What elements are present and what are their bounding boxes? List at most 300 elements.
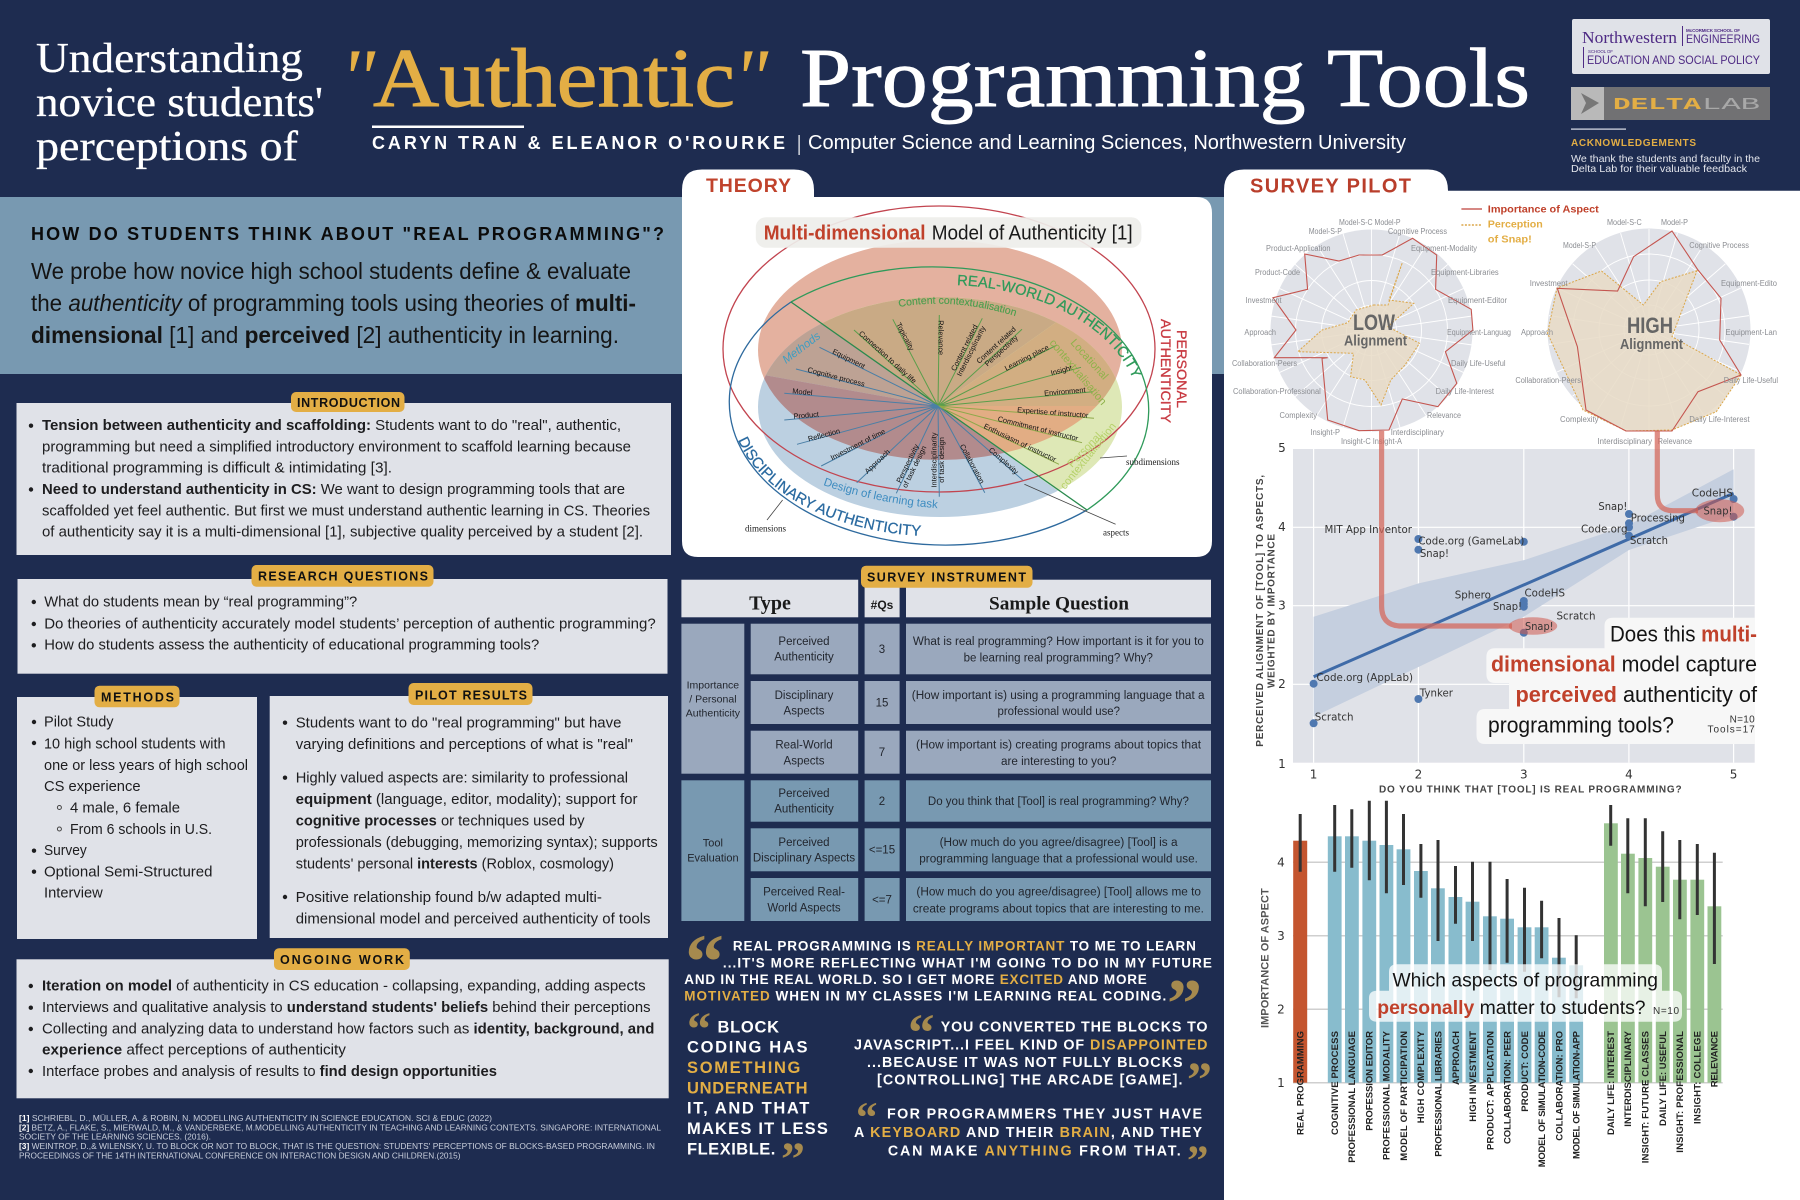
panel: methods: [17, 686, 257, 939]
radar chart: low alignment: Equipment-Libraries: [1431, 268, 1499, 277]
table group: importance / personal authenticity: Importance: [687, 679, 739, 691]
quote: keyboard and their brain: FOR PROGRAMMERS THEY JUST HAVE: [887, 1107, 1202, 1123]
aspect labels: Investment of time: [829, 427, 887, 462]
dimension labels: REAL-WORLD AUTHENTICITY: [958, 274, 1142, 376]
axis ticks: 1: [1310, 767, 1317, 781]
table group: importance / personal authenticity: [681, 624, 1211, 774]
table group: tool evaluation: [681, 780, 1211, 921]
bars: real-world aspects: [1604, 823, 1721, 1083]
text block: band summary: the authenticity of programming tools using theories of multi-: [31, 290, 636, 316]
regression line: [1314, 493, 1734, 677]
radar chart: low alignment: [1232, 218, 1511, 446]
text block: pilot results list: professionals (debugging, memorizing syntax); supports: [296, 834, 658, 851]
callout: does this model capture perceived authenticity: programming tools?: [1488, 713, 1674, 738]
logo: delta lab: [1571, 87, 1770, 120]
aspect labels: Collaboration: [958, 443, 987, 485]
tag: methods: [94, 686, 180, 707]
quote: real programming is really important: [684, 918, 1212, 1043]
text block: introduction bullets: of authenticity say it is a multi-dimensional [1], subjective quality perceived by a student [2].: [42, 524, 643, 541]
radar chart: low alignment: Model-S-P: [1309, 227, 1342, 236]
tool labels: Sphero: [1455, 588, 1491, 601]
diagram legend: subdimensions, dimensions, aspects: dimensions: [745, 524, 786, 534]
radar chart: low alignment: Complexity: [1280, 411, 1317, 420]
heading: how do students think: HOW DO STUDENTS THINK ABOUT "REAL PROGRAMMING"?: [31, 224, 664, 244]
quote: converted the blocks to javascript: [854, 1004, 1212, 1107]
table header: [681, 580, 1211, 617]
text block: introduction bullets: traditional programming is difficult & intimidating [3].: [42, 460, 392, 477]
table group: tool evaluation: 2: [879, 796, 885, 808]
text block: band summary: [31, 258, 636, 348]
callout: does this model capture perceived authenticity: Does this multi-: [1610, 622, 1757, 647]
diagram title pill: Multi-dimensional: [764, 222, 926, 244]
table group: tool evaluation: Perceived Real-: [763, 887, 845, 899]
title: authentic programming tools: Authentic: [373, 32, 735, 125]
aspect labels: Perspectivity: [894, 442, 921, 484]
dimension labels: Personal: [1066, 431, 1104, 470]
connector: low alignment radar to snap point: Snap!: [1525, 620, 1554, 633]
y axis ticks and title: 4: [1277, 856, 1285, 870]
quote: real programming is really important: “: [685, 918, 724, 1005]
diagram title pill: Model of Authenticity [1]: [932, 222, 1133, 244]
text block: methods list: Interview: [44, 885, 103, 902]
bar labels: DAILY LIFE: USEFUL: [1658, 1031, 1669, 1126]
text block: methods list: 10 high school students with: [44, 735, 226, 752]
diagram legend: subdimensions, dimensions, aspects: aspects: [1103, 528, 1129, 538]
acknowledgements: ACKNOWLEDGEMENTS: [1571, 138, 1696, 149]
title: authentic programming tools: Programming Tools: [800, 32, 1530, 125]
error bars: [1300, 801, 1714, 998]
diagram legend: subdimensions, dimensions, aspects: [745, 456, 1180, 538]
text block: band summary: dimensional [1] and perceived [2] authenticity in learning.: [31, 322, 619, 348]
callout: does this model capture perceived authenticity: Tools=17: [1708, 725, 1755, 736]
dimension labels: PERSONAL: [1174, 330, 1189, 409]
radar chart: low alignment: Model-S-C Model-P: [1339, 218, 1401, 227]
tool labels: Scratch: [1556, 610, 1596, 623]
table group: importance / personal authenticity: (How important is) creating programs about topics that: [916, 739, 1202, 751]
quote: keyboard and their brain: A KEYBOARD AND THEIR BRAIN, AND THEY: [854, 1125, 1202, 1141]
logo: northwestern: SCHOOL OF: [1588, 49, 1613, 54]
axis ticks: 4: [1278, 520, 1286, 534]
tool labels: Scratch: [1315, 711, 1354, 724]
quote: converted the blocks to javascript: JAVASCRIPT...I FEEL KIND OF DISAPPOINTED: [854, 1037, 1208, 1053]
radar chart: low alignment: Collaboration-Peers: [1232, 359, 1297, 368]
text block: research questions list: How do students assess the authenticity of educational programming tools?: [44, 636, 539, 653]
y axis ticks and title: 2: [1277, 1002, 1285, 1016]
callout: which aspects personally matter: N=10: [1653, 1006, 1679, 1017]
callout: does this model capture perceived authenticity: [1476, 618, 1758, 744]
quote: block coding has something underneath: ”: [781, 1133, 805, 1186]
panel: introduction: [16, 392, 671, 555]
radar chart: low alignment: Alignment: [1344, 333, 1407, 350]
aspect labels: Topicality: [894, 321, 916, 352]
table group: importance / personal authenticity: Perceived: [778, 636, 830, 648]
text block: ongoing work list: Interface probes and analysis of results to find design opportunities: [42, 1063, 497, 1080]
quote: converted the blocks to javascript: ”: [1187, 1051, 1212, 1107]
logo: northwestern: ENGINEERING: [1686, 32, 1760, 46]
axis ticks: 4: [1625, 767, 1633, 781]
bar labels: MODEL OF PARTICIPATION: [1399, 1031, 1410, 1161]
radar chart: high alignment: HIGH: [1627, 313, 1673, 338]
table group: tool evaluation: Evaluation: [687, 853, 739, 865]
aspect labels: Content related: [974, 325, 1018, 366]
authors and affiliation: Computer Science and Learning Sciences, Northwestern University: [808, 132, 1406, 154]
radar chart: high alignment: Approach: [1521, 328, 1553, 337]
tag: research questions: [252, 565, 434, 587]
table header: #Qs: [871, 598, 894, 612]
table group: tool evaluation: Disciplinary Aspects: [753, 853, 855, 865]
quote: converted the blocks to javascript: YOU CONVERTED THE BLOCKS TO: [941, 1020, 1208, 1036]
tag: research questions: RESEARCH QUESTIONS: [258, 570, 428, 584]
quote: real programming is really important: ”: [1167, 966, 1202, 1043]
radar chart: low alignment: Equipment-Languag: [1447, 328, 1511, 337]
dimension labels: AUTHENTICITY: [1158, 319, 1173, 423]
title: understanding novice students: perceptions of: [36, 124, 298, 170]
tool labels: Code.org (GameLab): [1418, 534, 1524, 547]
diagram: multi-dimensional model of authenticity: [722, 205, 1189, 546]
acknowledgements: We thank the students and faculty in the: [1571, 153, 1760, 165]
aspect spokes: [784, 315, 1094, 497]
logos and acknowledgements: [1571, 19, 1770, 175]
bar labels: HIGH COMPLEXITY: [1416, 1030, 1427, 1123]
table group: importance / personal authenticity: Authenticity: [774, 652, 834, 664]
text block: methods list: Survey: [44, 842, 87, 859]
tool labels: MIT App Inventor: [1324, 523, 1412, 536]
title: authentic programming tools: [340, 32, 1530, 125]
tool labels: [1315, 487, 1733, 724]
bar labels: MODEL OF SIMULATION-CODE: [1537, 1031, 1548, 1167]
aspect labels: Environment: [1044, 385, 1086, 398]
logo: northwestern: [1572, 19, 1770, 74]
title: understanding novice students: Understanding: [36, 36, 303, 82]
text block: methods list: one or less years of high school: [44, 757, 248, 774]
bar labels: HIGH INVESTMENT: [1468, 1031, 1479, 1122]
aspect labels: of task design: [900, 444, 928, 489]
text block: band summary: We probe how novice high school students define & evaluate: [31, 258, 631, 284]
connector: high alignment radar to snap point: [1657, 431, 1744, 522]
bar labels: PROFESSION EDITOR: [1365, 1031, 1376, 1131]
references: [2] BETZ, A., FLAKE, S., MIERWALD, M., & VANDERBEKE, M.MODELLING AUTHENTICITY IN TEACHING AND LEARNING CONTEXTS. SINGAPORE: INTERNATIONAL: [19, 1122, 661, 1132]
y axis ticks and title: 3: [1277, 929, 1285, 943]
radar chart: high alignment: Alignment: [1620, 336, 1683, 353]
text block: research questions list: Do theories of authenticity accurately model students’ perception of authentic programming?: [44, 615, 656, 632]
panel: research question band: [0, 197, 1226, 374]
quote: real programming is really important: ...IT'S MORE REFLECTING WHAT I'M GOING TO DO IN MY FUTURE: [723, 955, 1212, 970]
radar legend: Importance of Aspect: [1488, 204, 1599, 216]
table group: importance / personal authenticity: Aspects: [784, 705, 825, 717]
aspect labels: Approach: [863, 447, 892, 476]
bar labels: INSIGHT: PROFESSIONAL: [1675, 1031, 1686, 1153]
bar labels: COLLABORATION: PEER: [1502, 1031, 1513, 1144]
radar chart: low alignment: Equipment-Editor: [1448, 296, 1507, 305]
references: [3] WEINTROP, D.,& WILENSKY, U. TO BLOCK OR NOT TO BLOCK, THAT IS THE QUESTION: STUDENTS' PERCEPTIONS OF BLOCKS-BASED PROGRAMMING. IN: [19, 1141, 655, 1151]
quote: keyboard and their brain: ”: [1187, 1138, 1208, 1185]
text block: pilot results list: Highly valued aspects are: similarity to professional: [296, 770, 628, 787]
table group: importance / personal authenticity: 7: [879, 747, 885, 759]
text block: pilot results list: Students want to do "real programming" but have: [296, 715, 621, 732]
panel: research questions: [18, 565, 668, 674]
tag: pilot results: [408, 683, 532, 705]
tag: introduction: [291, 392, 404, 412]
text block: methods list: [32, 714, 248, 902]
aspect labels: Content related: [949, 323, 980, 372]
callout: does this model capture perceived authenticity: N=10: [1730, 715, 1755, 726]
callout: which aspects personally matter: [1369, 964, 1682, 1022]
aspect labels: Interdisciplinarity: [930, 432, 939, 488]
text block: research questions list: [32, 594, 656, 653]
quote: block coding has something underneath: SOMETHING: [687, 1059, 800, 1077]
table group: tool evaluation: Perceived: [778, 788, 830, 800]
tag: methods: METHODS: [101, 691, 174, 705]
quote: real programming is really important: MOTIVATED WHEN IN MY CLASSES I'M LEARNING REAL CODING.: [684, 989, 1166, 1004]
table group: importance / personal authenticity: are interesting to you?: [1001, 756, 1116, 768]
axis ticks: [1278, 441, 1737, 781]
aspect labels: of task design: [937, 437, 946, 483]
quote: keyboard and their brain: “: [856, 1095, 878, 1142]
table header: Sample Question: [989, 593, 1129, 614]
title: authentic programming tools: ": [340, 32, 376, 125]
radar chart: low alignment: Interdisciplinary: [1391, 428, 1444, 437]
axis ticks: 3: [1278, 598, 1286, 612]
tag: ongoing work: [274, 948, 410, 970]
bar labels: PROFESSIONAL MODALITY: [1382, 1030, 1393, 1160]
acknowledgements: Delta Lab for their valuable feedback: [1571, 163, 1748, 175]
table group: importance / personal authenticity: be learning real programming? Why?: [964, 653, 1153, 665]
diagram title pill: [756, 217, 1141, 248]
bar labels: RELEVANCE: [1710, 1031, 1721, 1087]
radar chart: low alignment: Approach: [1244, 328, 1276, 337]
confidence band: [1314, 469, 1734, 717]
aspect labels: Learning place: [1003, 343, 1050, 373]
scatter plot: alignment vs real programming: [1255, 441, 1755, 796]
data points: [1310, 495, 1738, 727]
text block: research questions list: What do students mean by “real programming”?: [44, 594, 357, 611]
table group: tool evaluation: (How much do you agree/disagree) [Tool] allows me to: [916, 887, 1201, 899]
bar: real programming: [1293, 841, 1307, 1083]
table group: importance / personal authenticity: Aspects: [784, 755, 825, 767]
text block: introduction bullets: Need to understand authenticity in CS: We want to design programming tools that are: [42, 481, 625, 498]
aspect labels: Expertise of instructor: [1017, 405, 1089, 420]
axis ticks: 2: [1415, 767, 1422, 781]
quote: block coding has something underneath: [687, 1003, 828, 1186]
aspect labels: Commitment of instructor: [997, 414, 1080, 443]
text block: introduction bullets: Tension between authenticity and scaffolding: Students want to do "real", authentic,: [42, 417, 621, 434]
radar legend: Perception: [1488, 218, 1543, 230]
bar labels: REAL PROGRAMMING: [1296, 1031, 1306, 1135]
text block: methods list: CS experience: [44, 778, 140, 795]
dimension labels: contextualisation: [1058, 421, 1119, 492]
panel: survey pilot: [1224, 170, 1800, 1200]
y axis ticks and title: IMPORTANCE OF ASPECT: [1260, 888, 1272, 1028]
quote: block coding has something underneath: UNDERNEATH: [687, 1079, 808, 1097]
table header: Type: [749, 592, 791, 614]
text block: ongoing work list: Interviews and qualitative analysis to understand students' beliefs behind their perceptions: [42, 999, 650, 1016]
bar labels: DAILY LIFE: INTEREST: [1606, 1031, 1617, 1135]
quote: block coding has something underneath: IT, AND THAT: [687, 1100, 809, 1118]
table group: importance / personal authenticity: What is real programming? How important is it for you to: [913, 636, 1204, 648]
axis titles: [1255, 475, 1682, 796]
dimension labels: DISCIPLINARY AUTHENTICITY: [738, 436, 922, 536]
text block: pilot results list: dimensional model and perceived authenticity of tools: [296, 910, 650, 927]
bar labels: INSIGHT: FUTURE CLASSES: [1641, 1031, 1652, 1163]
dimension labels: Methods: [781, 330, 823, 366]
text block: ongoing work list: experience affect perceptions of authenticity: [42, 1042, 347, 1059]
references: SOCIETY OF THE LEARNING SCIENCES. (2016).: [19, 1132, 211, 1142]
text block: pilot results list: students' personal interests (Roblox, cosmology): [296, 855, 614, 872]
bar labels: INTERDISCIPLINARY: [1623, 1030, 1634, 1127]
header: title: [36, 32, 1530, 170]
radar chart: low alignment: Relevance: [1427, 411, 1461, 420]
bars: disciplinary aspects: [1328, 836, 1583, 1083]
logo: northwestern: Northwestern: [1582, 28, 1678, 47]
quote: converted the blocks to javascript: [CONTROLLING] THE ARCADE [GAME].: [877, 1073, 1182, 1089]
axis ticks: 5: [1278, 441, 1286, 455]
table group: importance / personal authenticity: (How important is) using a programming language that a: [912, 690, 1205, 702]
radar chart: high alignment: Daily Life-Interest: [1689, 415, 1750, 424]
authors and affiliation: CARYN TRAN & ELEANOR O'ROURKE: [372, 133, 785, 153]
radar chart: high alignment: Interdisciplinary: [1598, 437, 1652, 446]
text block: introduction bullets: [29, 417, 650, 541]
bar labels: PRODUCT: CODE: [1520, 1031, 1531, 1112]
table group: importance / personal authenticity: Authenticity: [686, 708, 741, 720]
dimension labels: contextualisation: [1047, 337, 1109, 408]
references: [1] SCHRIEBL, D., MÜLLER, A. & ROBIN, N. MODELLING AUTHENTICITY IN SCIENCE EDUCATION. SCI & EDUC (2022): [19, 1113, 492, 1123]
bar labels: [1296, 1030, 1721, 1167]
radar chart: low alignment: Product-Code: [1255, 268, 1301, 277]
aspect labels: Product: [793, 410, 819, 421]
tool labels: Tynker: [1419, 687, 1453, 700]
aspect labels: Relevance: [937, 320, 946, 355]
axis ticks: 5: [1730, 767, 1737, 781]
table group: importance / personal authenticity: Real-World: [775, 739, 833, 751]
radar chart: high alignment: [1515, 218, 1778, 446]
radar chart: high alignment: Model-S-P: [1563, 241, 1596, 250]
tool labels: Snap!: [1598, 500, 1627, 513]
table group: tool evaluation: Do you think that [Tool] is real programming? Why?: [928, 796, 1189, 808]
radar chart: high alignment: Investment: [1530, 279, 1568, 288]
table group: importance / personal authenticity: 3: [879, 644, 885, 656]
quote: converted the blocks to javascript: ...BECAUSE IT WAS NOT FULLY BLOCKS: [867, 1055, 1182, 1071]
tag: survey instrument: SURVEY INSTRUMENT: [867, 571, 1026, 585]
logo: northwestern: McCORMICK SCHOOL OF: [1686, 28, 1740, 33]
radar chart: low alignment: Investment: [1246, 296, 1282, 305]
heading: theory: THEORY: [706, 175, 791, 197]
aspect labels: Interdisciplinarity: [955, 324, 988, 378]
radar chart: high alignment: Equipment-Edito: [1721, 279, 1778, 288]
tag: survey instrument: [861, 566, 1032, 588]
table group: tool evaluation: <=7: [872, 894, 892, 906]
text block: ongoing work list: Collecting and analyzing data to understand how factors such as identity, background, and: [42, 1020, 654, 1037]
title: understanding novice students: novice students': [36, 80, 323, 126]
radar chart: low alignment: Insight-C Insight-A: [1341, 437, 1403, 446]
callout: does this model capture perceived authenticity: dimensional model capture: [1491, 652, 1757, 677]
radar chart: high alignment: Relevance: [1658, 437, 1692, 446]
radar chart: high alignment: Collaboration-Peers: [1515, 376, 1581, 385]
aspect labels: Perspectivity: [983, 333, 1020, 368]
radar chart: high alignment: Daily Life-Useful: [1724, 376, 1778, 385]
bar chart: importance of aspects: [1260, 801, 1723, 1167]
text block: pilot results list: equipment (language, editor, modality); support for: [296, 791, 638, 808]
tool labels: Scratch: [1630, 534, 1668, 547]
text block: methods list: Pilot Study: [44, 714, 114, 731]
tag: introduction: INTRODUCTION: [297, 396, 400, 410]
axis titles: PERCEIVED ALIGNMENT OF [TOOL] TO ASPECTS,: [1255, 475, 1266, 747]
quote: block coding has something underneath: “: [687, 1003, 711, 1056]
text block: introduction bullets: programming but need a simplified introductory environment to scaffold learning because: [42, 439, 631, 456]
aspect labels: Insight: [1050, 363, 1073, 377]
text block: ongoing work list: [29, 978, 654, 1080]
axis titles: DO YOU THINK THAT [TOOL] IS REAL PROGRAMMING?: [1379, 785, 1682, 796]
bar labels: COGNITIVE PROCESS: [1330, 1031, 1341, 1135]
table group: tool evaluation: create programs about topics that are interesting to me.: [913, 903, 1204, 915]
heading: survey pilot: SURVEY PILOT: [1250, 176, 1411, 198]
dimension labels: Design of learning tasks: [824, 478, 938, 508]
radar chart: low alignment: Equipment-Modality: [1411, 244, 1477, 253]
aspect labels: Equipment: [831, 347, 867, 371]
radar chart: low alignment: Product-Application: [1266, 244, 1330, 253]
quote: block coding has something underneath: MAKES IT LESS: [687, 1120, 828, 1138]
radar chart: low alignment: Collaboration-Professional: [1233, 387, 1321, 396]
radar chart: high alignment: Model-P: [1661, 218, 1688, 227]
table group: tool evaluation: Authenticity: [774, 804, 834, 816]
text block: methods list: 4 male, 6 female: [70, 800, 180, 817]
dimension labels: [738, 274, 1189, 536]
callout: which aspects personally matter: personally matter to students?: [1377, 997, 1646, 1019]
quote: keyboard and their brain: CAN MAKE ANYTHING FROM THAT.: [888, 1143, 1181, 1159]
tag: ongoing work: ONGOING WORK: [280, 953, 404, 967]
axis ticks: 2: [1278, 677, 1286, 691]
panel: theory: [682, 170, 1212, 557]
connector: high alignment radar to snap point: Snap!: [1704, 504, 1732, 517]
dimension fills: [758, 248, 1122, 517]
aspect labels: Connection to daily life: [857, 329, 918, 385]
references: PROCEEDINGS OF THE 14TH INTERNATIONAL CONFERENCE ON INTERACTION DESIGN AND CHILDREN.(2015): [19, 1150, 461, 1160]
table group: importance / personal authenticity: Disciplinary: [775, 690, 834, 702]
y axis ticks and title: [1260, 856, 1285, 1090]
text block: methods list: From 6 schools in U.S.: [70, 821, 212, 838]
tool labels: CodeHS: [1524, 586, 1565, 599]
radar chart: low alignment: Cognitive Process: [1388, 227, 1447, 236]
bar labels: PROFESSIONAL LANGUAGE: [1347, 1031, 1358, 1163]
table group: tool evaluation: programming language that a professional would use.: [919, 854, 1198, 866]
bar labels: COLLABORATION: PRO: [1554, 1031, 1565, 1141]
dimension outlines: [723, 206, 1155, 545]
text block: pilot results list: varying definitions and perceptions of what is "real": [296, 736, 633, 753]
table group: tool evaluation: Perceived: [778, 837, 830, 849]
references: [19, 1113, 661, 1160]
dimension labels: Locational: [1068, 337, 1110, 382]
radar chart: high alignment: Cognitive Process: [1689, 241, 1749, 250]
bar labels: APPROACH: [1451, 1031, 1462, 1085]
tag: pilot results: PILOT RESULTS: [415, 689, 527, 703]
tool labels: Snap!: [1420, 547, 1449, 560]
logo: delta lab: DELTA: [1613, 96, 1702, 115]
bar labels: MODEL OF SIMULATION-APP: [1572, 1030, 1582, 1159]
text block: ongoing work list: Iteration on model of authenticity in CS education - collapsing, expanding, adding aspects: [42, 978, 646, 995]
connector: low alignment radar to snap point: [1382, 431, 1557, 635]
quote: real programming is really important: REAL PROGRAMMING IS REALLY IMPORTANT TO ME TO LEARN: [733, 939, 1196, 954]
bar labels: PROFESSIONAL LIBRARIES: [1433, 1031, 1444, 1157]
aspect labels: Complexity: [987, 445, 1021, 476]
y axis ticks and title: 1: [1277, 1076, 1285, 1090]
radar chart: high alignment: Equipment-Lan: [1726, 328, 1777, 337]
radar chart: high alignment: Model-S-C: [1607, 218, 1642, 227]
text block: pilot results list: cognitive processes or techniques used by: [296, 813, 585, 830]
axis ticks: 3: [1520, 767, 1528, 781]
tool labels: Snap!: [1493, 600, 1522, 613]
quote: keyboard and their brain: [854, 1095, 1208, 1185]
table group: tool evaluation: <=15: [869, 845, 895, 857]
authors and affiliation: [372, 132, 1406, 155]
